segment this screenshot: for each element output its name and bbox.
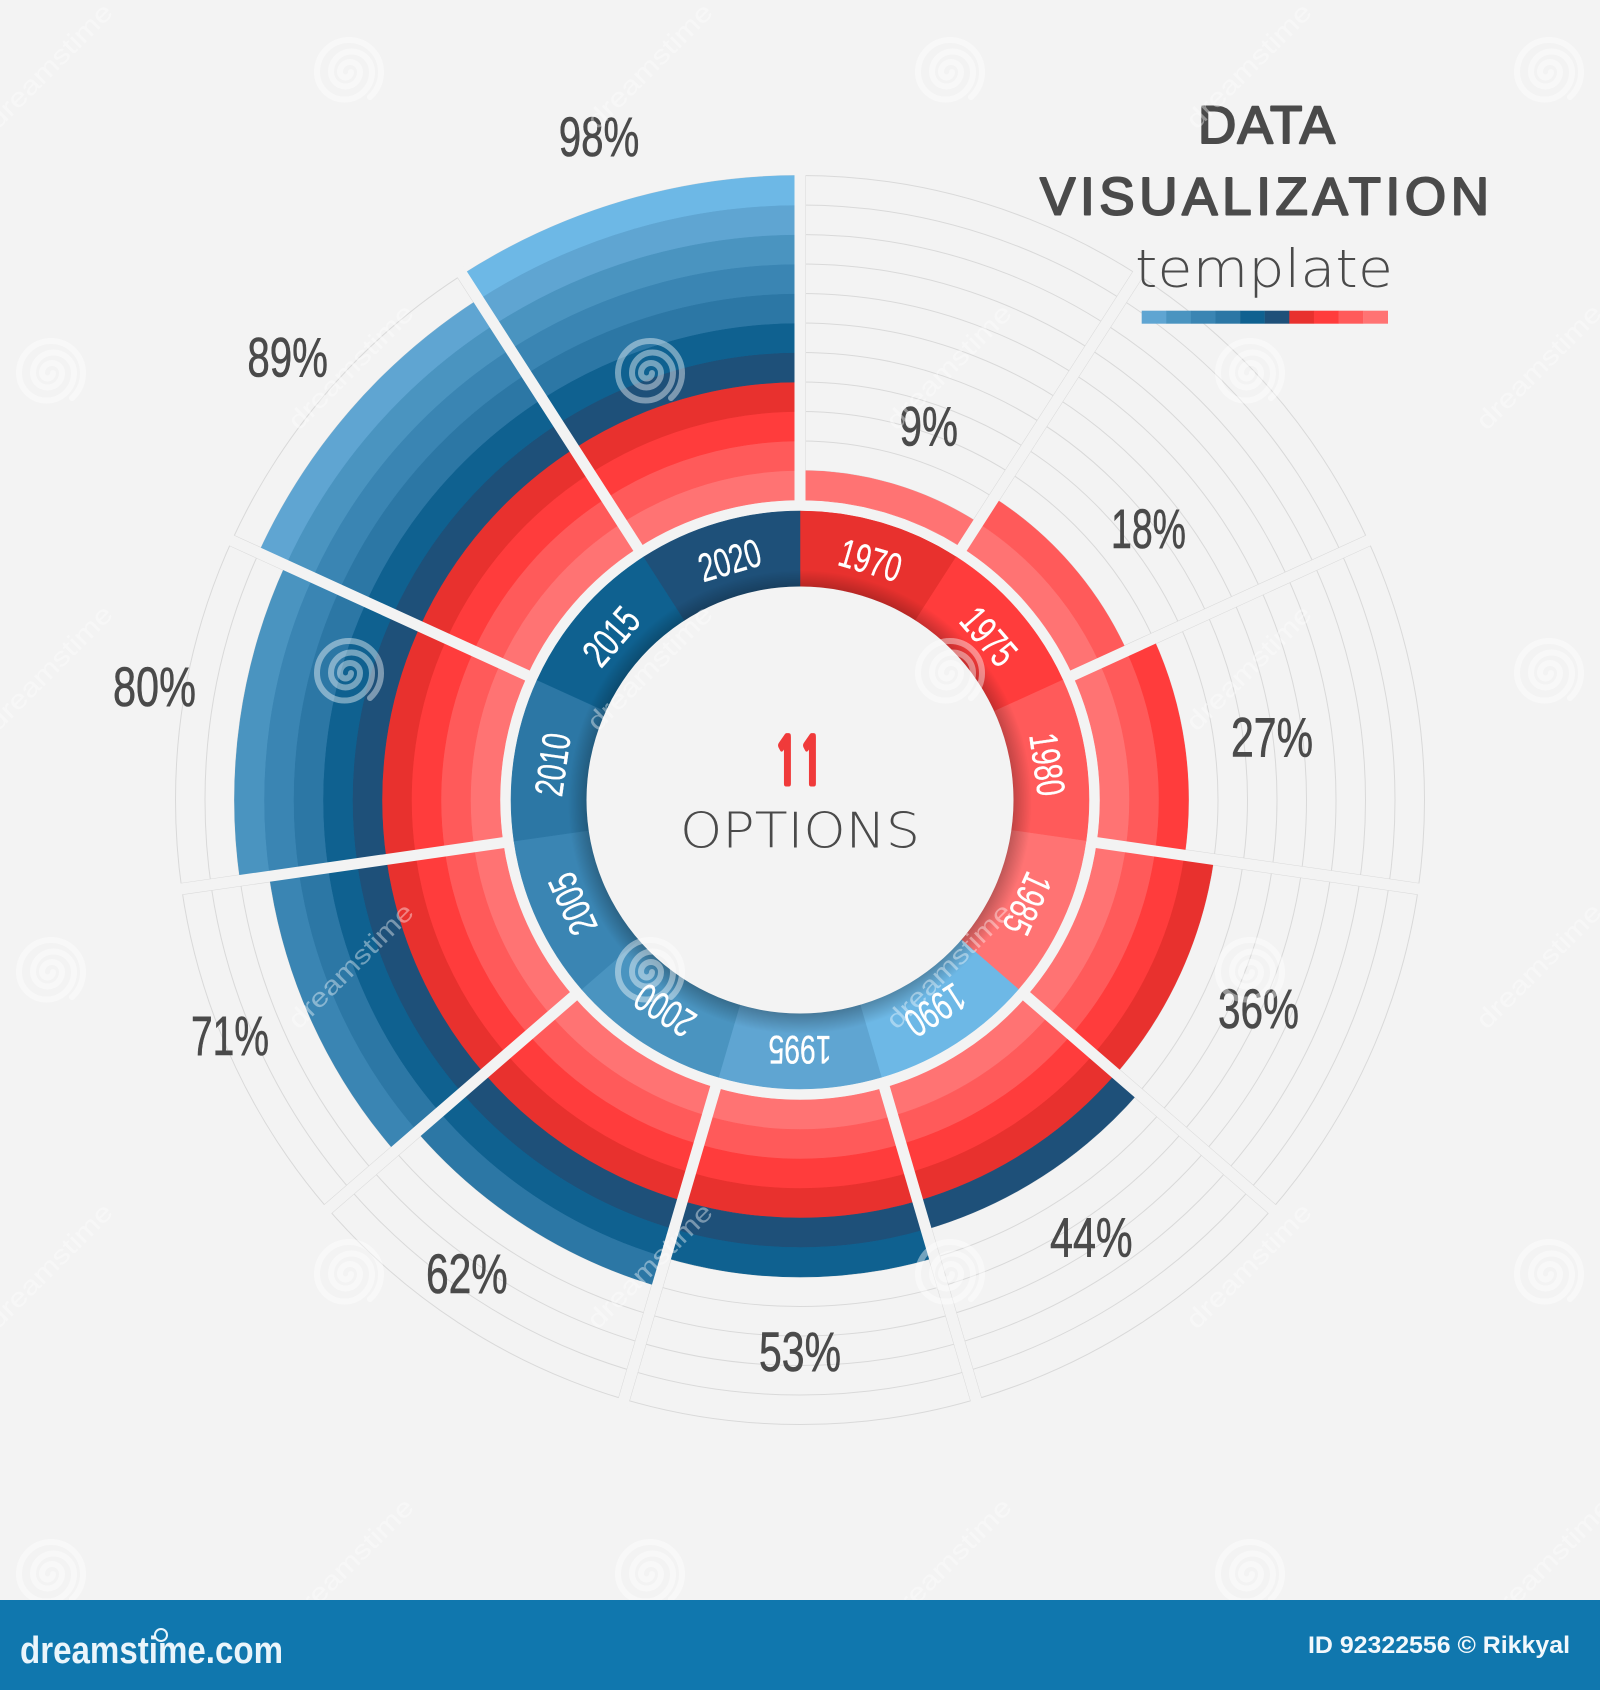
- heading line 2: VISUALIZATION: [1040, 168, 1489, 226]
- segment 1995: 53%: [624, 1042, 934, 1330]
- options caption: OPTIONS: [680, 803, 920, 860]
- year labels: 1975: [951, 599, 1025, 675]
- centre count: 11 options: [680, 729, 920, 860]
- year ring: [479, 472, 1128, 1121]
- watermark text: dreamstime: [282, 1492, 420, 1630]
- year labels: 2005: [540, 866, 607, 941]
- percent labels: [113, 105, 1313, 1383]
- segment 2005: 71%: [205, 746, 609, 1151]
- percent labels: 62%: [426, 1242, 508, 1305]
- percent labels: 27%: [1231, 706, 1313, 768]
- watermark text: dreamstime: [1470, 897, 1600, 1035]
- segment 1980: 27%: [1030, 639, 1241, 886]
- footer logo text: dreamstime.com: [20, 1630, 283, 1672]
- icon: logo spiral: [155, 1629, 167, 1641]
- year labels: 1985: [993, 866, 1060, 941]
- segment 2000: 62%: [395, 965, 729, 1286]
- watermark text: dreamstime: [581, 599, 719, 737]
- year labels: 1990: [896, 974, 973, 1045]
- segment 2010: 80%: [197, 533, 550, 880]
- year labels: 1970: [834, 531, 907, 591]
- watermark text: dreamstime: [880, 1492, 1018, 1630]
- segment 2015: 89%: [259, 260, 704, 695]
- watermark text: dreamstime: [1180, 599, 1318, 737]
- year labels: 2000: [627, 974, 704, 1045]
- segment 2020: 98%: [462, 92, 948, 588]
- year labels: 2015: [575, 599, 649, 675]
- percent labels: 71%: [191, 1004, 269, 1067]
- subtitle: template: [1135, 239, 1393, 300]
- watermark text: dreamstime: [282, 897, 420, 1035]
- watermark text: dreamstime: [1480, 1492, 1600, 1630]
- centre disc: [586, 586, 1014, 1014]
- percent labels: 36%: [1218, 977, 1299, 1040]
- image id credit: ID 92322556 © Rikkyal: [1308, 1632, 1570, 1659]
- watermark text: dreamstime: [581, 1197, 719, 1335]
- percent labels: 9%: [900, 394, 958, 458]
- watermark text: dreamstime: [1180, 0, 1318, 135]
- year labels: 2020: [693, 531, 766, 591]
- radial chart: [174, 92, 1426, 1424]
- watermark text: dreamstime: [1180, 1197, 1318, 1335]
- year labels: 1980: [1020, 730, 1073, 799]
- title block: [1040, 96, 1489, 324]
- percent labels: 44%: [1050, 1206, 1133, 1268]
- year labels: [527, 531, 1073, 1071]
- segment 1970: 9%: [800, 470, 978, 548]
- segment 1985: 36%: [1018, 836, 1214, 1083]
- segment 1975: 18%: [936, 498, 1157, 693]
- colour legend bar: [1142, 311, 1388, 324]
- number 11: 11: [774, 729, 824, 794]
- segment 1990: 44%: [832, 965, 1138, 1276]
- heading line 1: DATA: [1198, 96, 1336, 155]
- watermark text: dreamstime: [880, 298, 1018, 436]
- year labels: 1995: [768, 1027, 832, 1071]
- percent labels: 98%: [559, 105, 639, 168]
- watermark text: dreamstime: [880, 897, 1018, 1035]
- watermark text: dreamstime: [1470, 298, 1600, 436]
- watermark text: dreamstime: [282, 298, 420, 436]
- percent labels: 80%: [113, 655, 196, 718]
- background grid rings: [176, 176, 1424, 1424]
- percent labels: 18%: [1111, 497, 1186, 560]
- year labels: 2010: [527, 730, 580, 799]
- footer banner: [0, 1600, 1600, 1690]
- watermark text: dreamstime: [581, 0, 719, 135]
- percent labels: 89%: [247, 326, 328, 388]
- percent labels: 53%: [759, 1320, 841, 1383]
